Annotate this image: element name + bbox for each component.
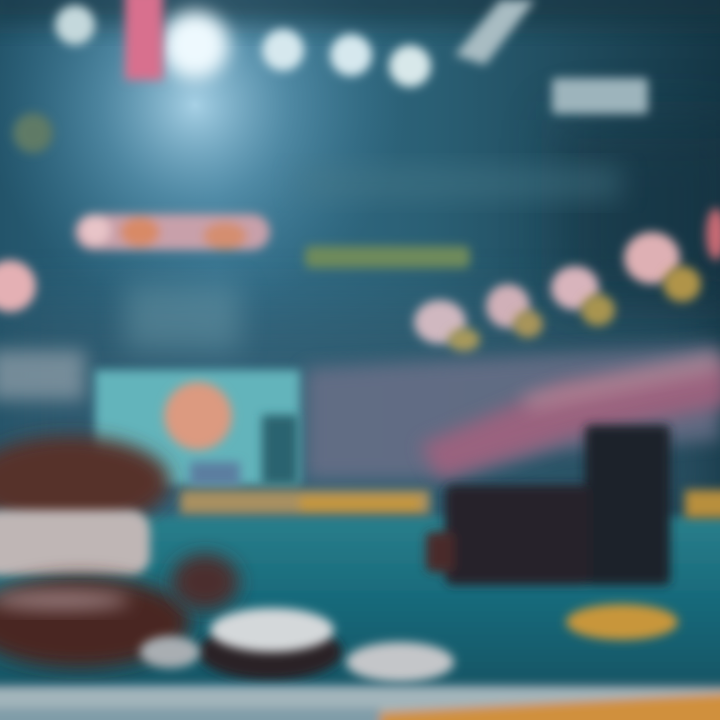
teal screen [95, 370, 300, 486]
crowd [305, 345, 720, 480]
white sign top right [552, 78, 648, 114]
olive dot [13, 113, 53, 153]
faint wall text [300, 168, 620, 198]
dark chip stacks right [426, 425, 670, 585]
left grey sign [0, 350, 85, 400]
table surface [0, 516, 720, 686]
ceiling lights [55, 0, 535, 87]
pink orange banner [75, 214, 270, 250]
orange table edge [180, 490, 720, 518]
brown white chip pile left [0, 436, 239, 668]
bottom rail [0, 686, 720, 720]
pink banner top [125, 0, 163, 80]
left pink circle [0, 260, 36, 312]
orange oval chip [566, 604, 678, 640]
faint wall sign left [125, 285, 240, 350]
white chips front [140, 608, 454, 682]
yellow green sign [305, 246, 470, 268]
row of balloons [414, 208, 720, 352]
